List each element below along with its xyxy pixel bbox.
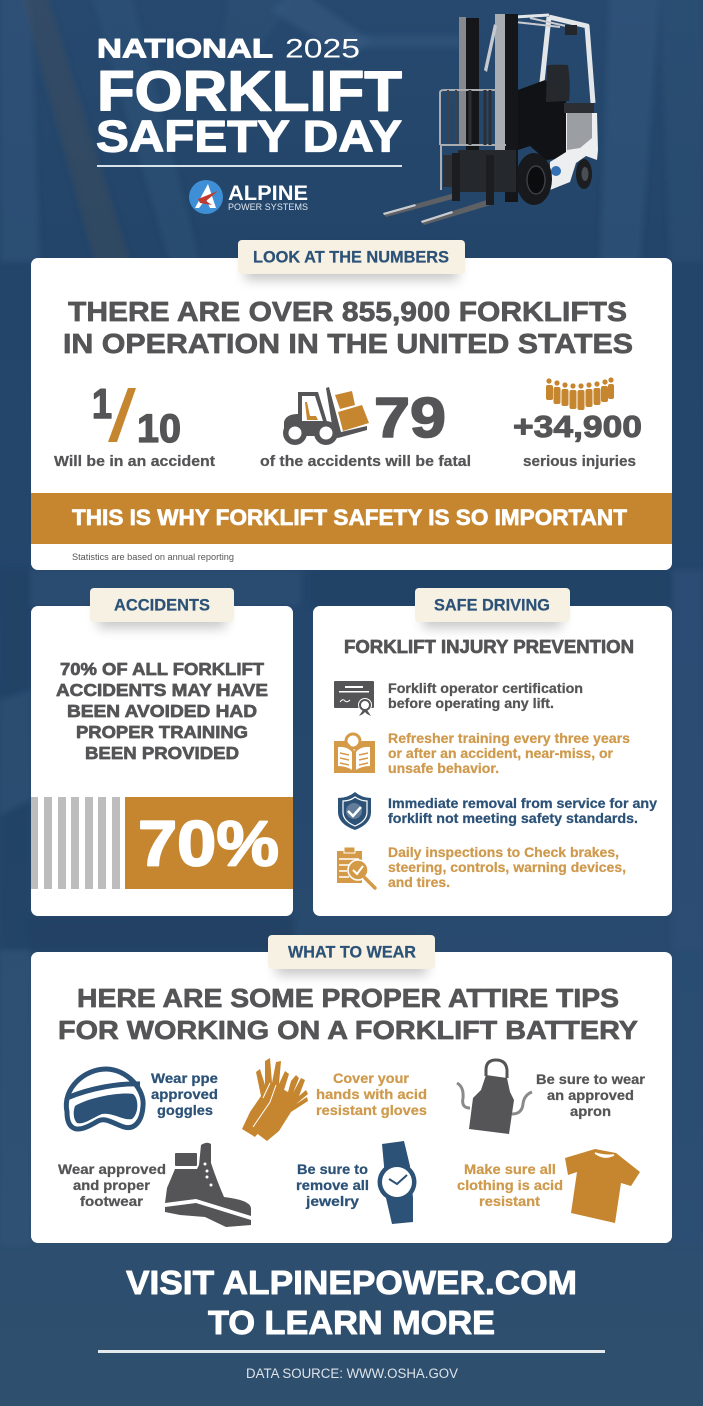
stat: 79 fatal <box>260 386 471 470</box>
logo: alpine power systems: POWER SYSTEMS <box>228 202 308 212</box>
text: gloves: resistant gloves <box>316 1102 427 1118</box>
text: footwear: footwear <box>80 1193 144 1209</box>
icon: apron <box>457 1060 532 1134</box>
stat: 1 in 10 <box>54 380 215 470</box>
stat: 34,900 injuries: serious injuries <box>523 453 636 470</box>
data source: DATA SOURCE: WWW.OSHA.GOV <box>246 1366 458 1381</box>
call to action: TO LEARN MORE <box>208 1304 495 1341</box>
text: goggles: approved <box>151 1086 218 1102</box>
tab: safe driving: SAFE DRIVING <box>434 596 550 614</box>
seat <box>546 65 570 102</box>
forks <box>383 193 494 225</box>
mast <box>459 14 518 202</box>
banner: why forklift safety matters <box>31 493 672 544</box>
text: clothing <box>457 1161 563 1209</box>
text: certification: Forklift operator certification <box>388 681 583 696</box>
text: immediate removal: Immediate removal from service for any <box>388 796 658 811</box>
overhead guard <box>515 15 593 147</box>
tab: safe driving <box>415 588 570 628</box>
call to action: VISIT ALPINEPOWER.COM <box>126 1264 577 1301</box>
icon: gloves <box>242 1058 308 1141</box>
footnote: Statistics are based on annual reporting <box>72 552 234 562</box>
carriage fence <box>440 90 506 190</box>
text: 70 percent avoidable: 70% OF ALL FORKLIFT <box>60 659 264 679</box>
icon: forklift with boxes <box>283 387 369 445</box>
call to action <box>98 1264 605 1353</box>
text: apron: an approved <box>547 1087 634 1103</box>
stat: 1 in 10: 10 <box>137 407 181 451</box>
logo: alpine power systems <box>189 180 308 214</box>
logo: alpine power systems: ALPINE <box>228 182 308 205</box>
title line: national 2025 <box>97 34 360 64</box>
stat: 34,900 injuries <box>513 409 642 470</box>
text: clothing: clothing is acid <box>457 1177 563 1193</box>
icon: watch <box>378 1141 416 1224</box>
tab: accidents <box>90 588 234 628</box>
stat: 34,900 injuries: +34,900 <box>513 409 642 444</box>
text: daily inspections: steering, controls, warning devices, <box>388 860 626 875</box>
heading: forklifts in operation: IN OPERATION IN THE UNITED STATES <box>63 328 633 359</box>
front wheel <box>516 153 552 205</box>
text: daily inspections: and tires. <box>388 875 450 890</box>
heading: forklift injury prevention: FORKLIFT INJURY PREVENTION <box>344 637 634 657</box>
text: 70 percent avoidable: ACCIDENTS MAY HAVE <box>56 680 268 700</box>
heading: proper attire tips: FOR WORKING ON A FORKLIFT BATTERY <box>58 1015 638 1045</box>
stat: 79 fatal: 79 <box>374 386 446 450</box>
icon: shield <box>338 792 371 830</box>
text: immediate removal: forklift not meeting safety standards. <box>388 811 638 826</box>
icon: boot <box>165 1143 251 1227</box>
text: goggles <box>151 1070 218 1118</box>
text: immediate removal <box>388 796 658 826</box>
text: 70 percent avoidable: BEEN AVOIDED HAD <box>67 701 257 721</box>
icon: goggles <box>66 1069 143 1129</box>
text: daily inspections <box>388 845 626 890</box>
title line: national 2025: NATIONAL <box>97 34 273 64</box>
title line: forklift: FORKLIFT <box>97 60 402 122</box>
icon: certificate <box>334 681 374 716</box>
text: jewelry: Be sure to <box>297 1161 368 1177</box>
text: 70 percent avoidable <box>56 659 268 763</box>
tab: look at the numbers: LOOK AT THE NUMBERS <box>253 248 449 266</box>
text: apron: Be sure to wear <box>536 1071 646 1087</box>
text: footwear <box>58 1161 166 1209</box>
text: jewelry <box>296 1161 369 1209</box>
text: refresher training: Refresher training every three years <box>388 731 630 746</box>
tab: what to wear <box>268 935 435 975</box>
heading: proper attire tips: HERE ARE SOME PROPER ATTIRE TIPS <box>77 983 619 1013</box>
tab: what to wear: WHAT TO WEAR <box>288 944 416 962</box>
text: 70 percent avoidable: BEEN PROVIDED <box>85 743 239 763</box>
text: refresher training: or after an accident, near-miss, or <box>388 746 614 761</box>
text: gloves <box>316 1070 427 1118</box>
tab: look at the numbers <box>238 240 465 280</box>
heading: forklifts in operation <box>63 296 633 359</box>
heading: forklifts in operation: THERE ARE OVER 855,900 FORKLIFTS <box>68 296 627 327</box>
text: refresher training: unsafe behavior. <box>388 761 499 776</box>
icon: inspection clipboard <box>337 847 375 888</box>
stat: 1 in 10: Will be in an accident <box>54 453 215 470</box>
panel: what to wear <box>31 952 672 1243</box>
panel: accidents <box>31 606 293 916</box>
stat: 1 in 10: 1 <box>92 380 112 427</box>
text: footwear: and proper <box>73 1177 151 1193</box>
text: gloves: hands with acid <box>316 1086 427 1102</box>
text: jewelry: remove all <box>296 1177 369 1193</box>
text: 70 percent avoidable: PROPER TRAINING <box>76 722 248 742</box>
text: gloves: Cover your <box>333 1070 410 1086</box>
text: certification <box>388 681 583 711</box>
panel: look at the numbers <box>31 258 672 570</box>
text: clothing: resistant <box>479 1193 540 1209</box>
stat: 79 fatal: of the accidents will be fatal <box>260 453 471 470</box>
text: apron: apron <box>570 1103 611 1119</box>
text: jewelry: jewelry <box>305 1193 359 1209</box>
text: apron <box>536 1071 646 1119</box>
icon: t-shirt <box>565 1149 640 1223</box>
text: goggles: goggles <box>157 1102 213 1118</box>
chart: 70 percent bar: 70% <box>138 808 279 880</box>
icon: crowd of people <box>546 377 614 410</box>
text: clothing: Make sure all <box>464 1161 556 1177</box>
chart: 70 percent bar <box>31 797 293 889</box>
text: certification: before operating any lift. <box>388 696 554 711</box>
panel: safe driving <box>313 606 672 916</box>
title block <box>96 34 402 167</box>
text: footwear: Wear approved <box>58 1161 166 1177</box>
forklift photo illustration <box>383 14 598 225</box>
cab interior <box>518 80 566 160</box>
tab: accidents: ACCIDENTS <box>114 596 210 614</box>
text: refresher training <box>388 731 630 776</box>
icon: training book <box>334 734 375 773</box>
text: goggles: Wear ppe <box>151 1070 218 1086</box>
title line: national 2025: 2025 <box>285 34 360 64</box>
title line: safety day: SAFETY DAY <box>96 112 402 162</box>
text: daily inspections: Daily inspections to Check brakes, <box>388 845 619 860</box>
heading: proper attire tips <box>58 983 638 1045</box>
rear wheel <box>576 159 592 189</box>
body <box>550 113 598 190</box>
banner: why forklift safety matters: THIS IS WHY FORKLIFT SAFETY IS SO IMPORTANT <box>72 505 628 530</box>
